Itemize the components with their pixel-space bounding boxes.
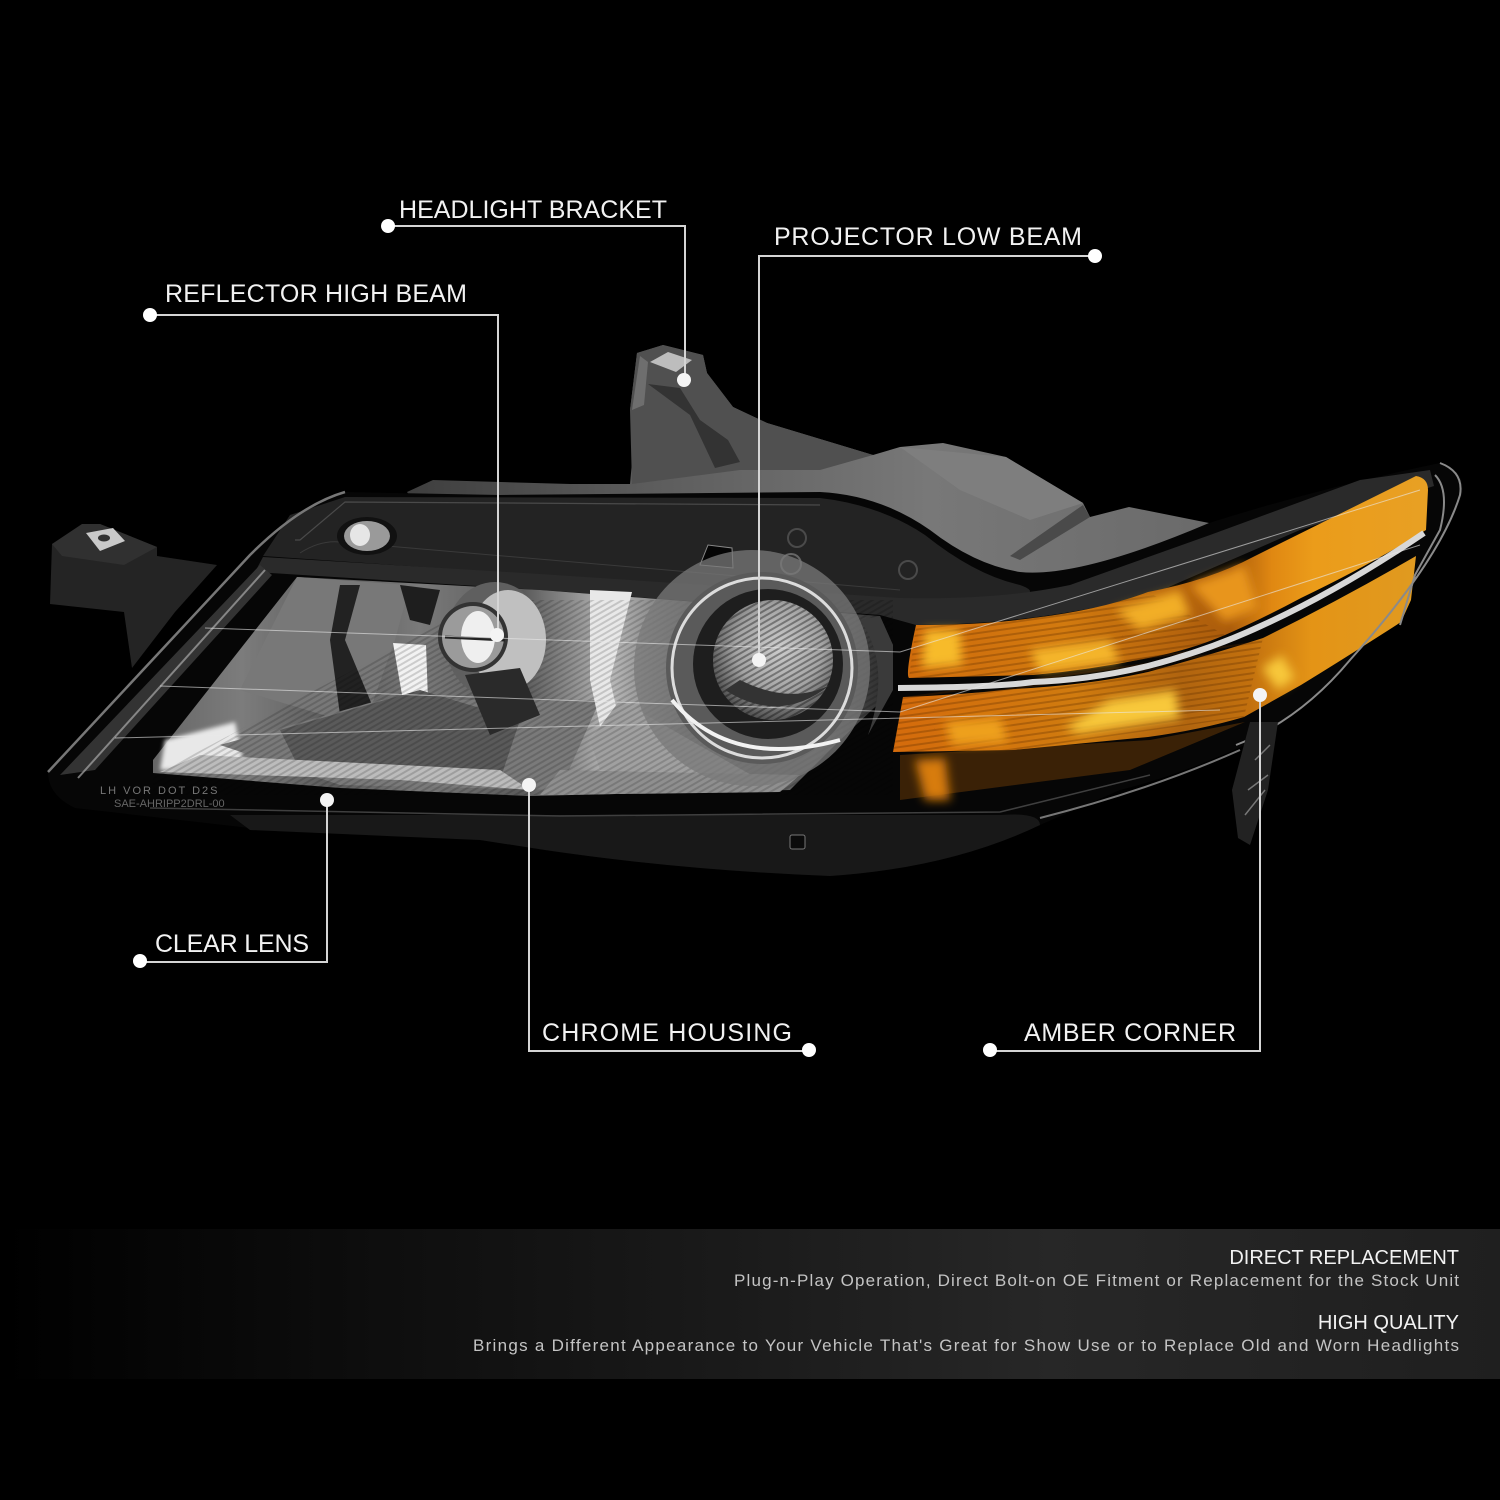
feature heading: high quality: HIGH QUALITY [1318, 1312, 1459, 1334]
projector low beam [634, 550, 893, 786]
callout: amber corner: AMBER CORNER [1024, 1019, 1236, 1047]
chrome strip between lenses [898, 533, 1424, 688]
lens marking text: LH VOR DOT D2S [100, 785, 220, 797]
bottom info band [0, 1229, 1500, 1379]
lens marking text [100, 785, 225, 810]
left lens trim [60, 565, 272, 775]
headlight product illustration [48, 345, 1463, 876]
lens marking text: SAE-AHRIPP2DRL-00 [114, 798, 225, 810]
callout: clear lens: CLEAR LENS [155, 930, 309, 958]
black outer body [48, 463, 1463, 876]
feature text: direct replacement: Plug-n-Play Operation, Direct Bolt-on OE Fitment or Replacement for the Stock Unit [734, 1271, 1459, 1290]
rear housing and top bracket [407, 345, 1209, 590]
chrome housing [153, 577, 893, 796]
frame bar under panel [255, 470, 1434, 625]
feature heading: direct replacement: DIRECT REPLACEMENT [1229, 1247, 1459, 1269]
callout: chrome housing: CHROME HOUSING [542, 1019, 792, 1047]
callout: chrome housing [522, 778, 816, 1057]
high beam reflector [438, 582, 546, 735]
lens reflection lines [115, 490, 1420, 738]
callout: reflector high beam: REFLECTOR HIGH BEAM [165, 280, 467, 308]
callout: headlight bracket [381, 196, 691, 387]
lower black trim [230, 814, 1040, 876]
callout: headlight bracket: HEADLIGHT BRACKET [399, 196, 667, 224]
left mounting bracket [50, 524, 217, 668]
callout: amber corner [983, 688, 1267, 1057]
callout: projector low beam: PROJECTOR LOW BEAM [774, 223, 1082, 251]
amber corner lenses [893, 476, 1428, 752]
upper black panel and marker lamp [263, 497, 1030, 605]
feature text: high quality: Brings a Different Appearance to Your Vehicle That's Great for Show Use or to Replace Old and Worn Headlights [473, 1336, 1459, 1355]
lower tab [1232, 722, 1278, 845]
callout: reflector high beam [143, 280, 504, 642]
lens rim highlights [1236, 463, 1461, 745]
callout: projector low beam [752, 223, 1102, 667]
amber reflection on lower trim [900, 722, 1245, 800]
callout: clear lens [133, 793, 334, 968]
